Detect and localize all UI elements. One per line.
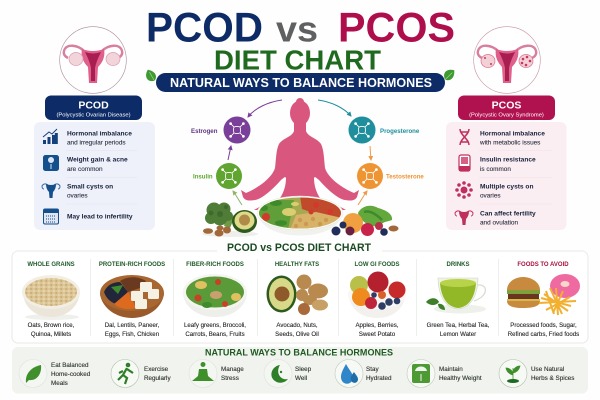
item: hydrate: Stay — [366, 366, 379, 373]
icon: right leaf — [441, 67, 457, 83]
title: PCOD vs PCOS: PCOD — [146, 4, 263, 50]
column: fiber-rich foods: Leafy greens, Broccoli, — [184, 322, 246, 329]
item: balanced meals: Home-cooked — [51, 371, 91, 378]
column: low GI foods: Apples, Berries, — [355, 322, 399, 329]
column: healthy fats: HEALTHY FATS — [275, 262, 319, 268]
heading: natural ways: NATURAL WAYS TO BALANCE HORMONES — [205, 348, 393, 358]
item: herbs: Use Natural — [531, 366, 564, 373]
icon: small navy uterus — [42, 184, 60, 198]
icon: chart — [43, 129, 58, 144]
item: healthy weight: Healthy Weight — [439, 375, 482, 382]
badge: PCOS: (Polycystic Ovary Syndrome) — [469, 112, 544, 118]
icon: DNA — [460, 129, 469, 145]
icon: small crimson uterus — [455, 211, 473, 225]
item: stress: Stress — [221, 375, 239, 382]
item: stress — [189, 360, 244, 388]
panel: PCOD symptoms: are common — [67, 166, 103, 173]
banner: natural ways to balance hormones: NATURAL WAYS TO BALANCE HORMONES — [170, 76, 432, 90]
panel: PCOS symptoms: and ovulation — [480, 220, 518, 226]
column: foods to avoid: Refined carbs, Fried foods — [508, 331, 579, 338]
column: fiber-rich foods — [183, 262, 247, 338]
column: low GI foods: Sweet Potato — [359, 331, 396, 338]
item: hydrate: Hydrated — [366, 375, 392, 382]
panel: PCOS symptoms: Insulin resistance — [480, 156, 536, 164]
icon: insulin — [216, 163, 242, 189]
column: healthy fats: Seeds, Olive Oil — [275, 331, 319, 338]
panel: PCOD symptoms: Hormonal imbalance — [67, 130, 132, 138]
column: whole grains: Quinoa, Millets — [31, 331, 71, 338]
panel: PCOS symptoms: Multiple cysts on — [480, 184, 534, 190]
food: left group — [202, 202, 258, 237]
icon: calendar — [44, 209, 58, 224]
icon: testosterone — [357, 163, 383, 189]
item: hydrate — [335, 360, 392, 388]
item: sleep: Well — [295, 375, 307, 382]
item: exercise: Exercise — [144, 366, 169, 373]
item: balanced meals: Eat Balanced — [51, 362, 89, 369]
label: estrogen: Estrogen — [191, 128, 218, 135]
panel: PCOD symptoms: Small cysts on — [67, 184, 113, 190]
item: sleep — [264, 360, 312, 388]
label: insulin: Insulin — [193, 174, 213, 180]
item: exercise — [111, 360, 171, 388]
item: balanced meals — [19, 360, 91, 388]
column: whole grains: WHOLE GRAINS — [27, 262, 75, 268]
column: drinks: DRINKS — [446, 262, 470, 268]
banner: natural ways to balance hormones — [156, 73, 445, 92]
column: foods to avoid: FOODS TO AVOID — [517, 262, 569, 268]
icon: left leaf — [143, 68, 158, 84]
heading: diet chart section: PCOD vs PCOS DIET CHART — [227, 242, 371, 254]
panel: PCOD symptoms: ovaries — [67, 192, 88, 200]
column: foods to avoid — [507, 262, 580, 338]
icon: PCOS uterus — [474, 27, 540, 93]
column: low GI foods — [348, 262, 406, 338]
panel: PCOS symptoms: with metabolic issues — [479, 140, 540, 146]
column: protein-rich foods: PROTEIN-RICH FOODS — [99, 262, 165, 268]
column: protein-rich foods: Eggs, Fish, Chicken — [105, 331, 159, 338]
column: fiber-rich foods: Carrots, Beans, Fruits — [185, 331, 245, 338]
panel: PCOS symptoms — [446, 122, 566, 230]
item: herbs — [499, 360, 574, 388]
column: drinks: Lemon Water — [440, 331, 476, 338]
title: PCOD vs PCOS: PCOS — [338, 4, 455, 50]
column: fiber-rich foods: FIBER-RICH FOODS — [186, 262, 244, 268]
label: testosterone: Testosterone — [386, 174, 424, 180]
column: healthy fats — [266, 262, 328, 338]
badge: PCOD: (Polycystic Ovarian Disease) — [56, 112, 131, 118]
icon: scale — [43, 155, 59, 171]
title: PCOD vs PCOS: vs — [276, 8, 318, 50]
item: healthy weight: Maintain — [439, 366, 463, 373]
figure: meditating woman silhouette — [241, 98, 359, 210]
column: drinks: Green Tea, Herbal Tea, — [427, 322, 490, 329]
panel: PCOD symptoms: Weight gain & acne — [67, 156, 128, 164]
item: sleep: Sleep — [295, 366, 312, 373]
column: protein-rich foods: Dal, Lentils, Paneer, — [105, 322, 160, 329]
item: exercise: Regularly — [144, 375, 171, 382]
panel: natural ways — [12, 347, 588, 394]
badge: PCOS — [458, 96, 555, 120]
item: herbs: Herbs & Spices — [531, 375, 574, 382]
panel: PCOS symptoms: Can affect fertility — [480, 210, 536, 218]
food: central salad bowl — [257, 196, 343, 236]
panel: PCOD symptoms: May lead to infertility — [67, 214, 133, 220]
heading: diet chart: DIET CHART — [214, 44, 381, 76]
panel: PCOD symptoms — [34, 122, 155, 230]
panel: diet chart — [12, 240, 588, 343]
column: whole grains: Oats, Brown rice, — [28, 322, 75, 329]
column: drinks — [426, 262, 490, 338]
panel: PCOS symptoms: ovaries — [480, 192, 501, 200]
panel: PCOD symptoms: and irregular periods — [67, 140, 126, 146]
icon: estrogen — [224, 116, 250, 144]
item: healthy weight — [407, 360, 482, 388]
food: right group — [332, 206, 398, 236]
panel: PCOS symptoms: Hormonal imbalance — [480, 130, 545, 138]
item: stress: Manage — [221, 366, 244, 373]
icon: cysts — [455, 181, 473, 199]
column: healthy fats: Avocado, Nuts, — [276, 322, 318, 329]
icon: progesterone — [348, 116, 376, 144]
title: PCOD vs PCOS — [146, 4, 455, 50]
column: whole grains — [22, 262, 80, 338]
item: balanced meals: Meals — [51, 380, 68, 387]
column: foods to avoid: Processed foods, Sugar, — [510, 322, 577, 329]
icon: PCOD uterus — [60, 27, 126, 93]
column: protein-rich foods — [99, 262, 165, 338]
arrows: hormone cycle — [228, 100, 371, 205]
badge: PCOD: PCOD — [78, 100, 109, 112]
column: low GI foods: LOW GI FOODS — [354, 262, 400, 268]
icon: glucose meter — [459, 155, 470, 171]
panel: PCOS symptoms: is common — [480, 166, 511, 173]
badge: PCOD — [45, 96, 142, 120]
badge: PCOS: PCOS — [492, 100, 521, 112]
label: progesterone: Progesterone — [380, 128, 420, 135]
